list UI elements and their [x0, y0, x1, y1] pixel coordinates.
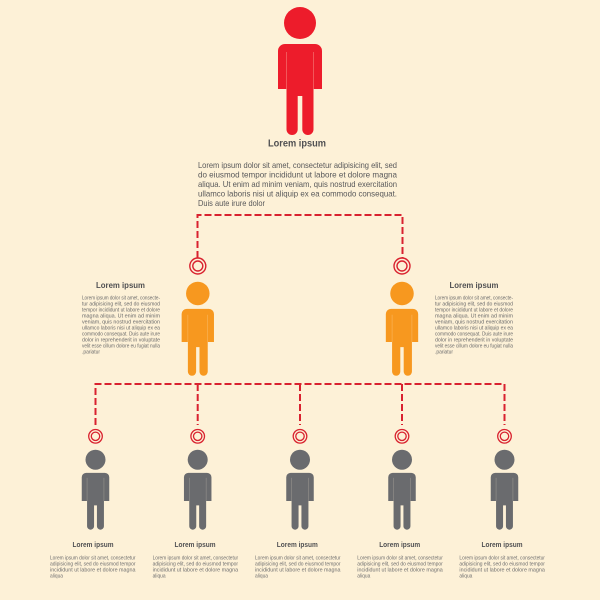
team member 5: aliqua: [459, 574, 473, 580]
text block: right manager: .pariatur: [435, 350, 453, 356]
text block: right manager: commodo consequat. Duis aute irure: [435, 332, 513, 338]
text block: right manager: veniam, quis nostrud exercitation: [435, 320, 513, 326]
figure: orange right manager: [386, 282, 418, 376]
team member 5: incididunt ut labore et dolore magna: [459, 568, 545, 574]
heading: leader name: Lorem ipsum: [268, 138, 326, 150]
team member 1: adipisicing elit, sed do eiusmod tempor: [50, 562, 136, 568]
team member 3: adipisicing elit, sed do eiusmod tempor: [255, 562, 341, 568]
text block: leader description: aliqua. Ut enim ad minim veniam, quis nostrud exercitation: [198, 180, 397, 189]
text block: left manager: .pariatur: [82, 350, 100, 356]
text block: left manager: Lorem ipsum dolor sit amet, consecte-: [82, 296, 160, 302]
text block: leader description: do eiusmod tempor incididunt ut labore et dolore magna: [198, 170, 397, 180]
team member 4: adipisicing elit, sed do eiusmod tempor: [357, 562, 443, 568]
team member 2: Lorem ipsum dolor sit amet, consectetur: [153, 556, 238, 562]
text block: right manager: velit esse cillum dolore eu fugiat nulla: [435, 344, 513, 350]
team member 3: Lorem ipsum dolor sit amet, consectetur: [255, 556, 341, 562]
text block: right manager: tur adipisicing elit, sed do eiusmod: [435, 302, 513, 308]
figure: red leader: [278, 7, 322, 135]
team member 3: incididunt ut labore et dolore magna: [255, 568, 341, 574]
team member 4: [357, 430, 443, 580]
text block: leader description: Duis aute irure dolor: [198, 199, 265, 208]
team member 5: [459, 430, 545, 580]
team member 1: Lorem ipsum: [72, 542, 114, 549]
text block: right manager: [435, 296, 513, 356]
team member 3: [255, 430, 341, 580]
heading: right manager: Lorem ipsum: [450, 280, 499, 290]
text block: left manager: ullamco laboris nisi ut aliquip ex ea: [82, 326, 160, 332]
team member 2: [153, 430, 238, 580]
team member 4: incididunt ut labore et dolore magna: [357, 568, 443, 574]
team member 5: Lorem ipsum: [482, 542, 522, 549]
text block: leader description: ullamco laboris nisi ut aliquip ex ea commodo consequat.: [198, 190, 397, 198]
team member 3: Lorem ipsum: [277, 542, 318, 549]
icon: target left manager: [190, 258, 206, 274]
figure: orange left manager: [182, 282, 214, 376]
text block: right manager: Lorem ipsum dolor sit amet, consecte-: [435, 296, 513, 302]
team member 2: aliqua: [153, 574, 166, 580]
text block: left manager: tur adipisicing elit, sed do eiusmod: [82, 302, 160, 308]
text block: left manager: magna aliqua. Ut enim ad minim: [82, 314, 160, 320]
team member 1: Lorem ipsum dolor sit amet, consectetur: [50, 556, 136, 562]
team member 1: [50, 430, 136, 580]
text block: leader description: Lorem ipsum dolor sit amet, consectetur adipisicing elit, sed: [198, 161, 397, 170]
text block: right manager: tempor incididunt ut labore et dolore: [435, 308, 513, 314]
team member 3: aliqua: [255, 574, 268, 580]
text block: left manager: dolor in reprehenderit in voluptate: [82, 338, 160, 344]
team member 4: Lorem ipsum: [379, 542, 420, 549]
text block: left manager: [82, 296, 160, 356]
text block: left manager: tempor incididunt ut labore et dolore: [82, 308, 160, 314]
text block: right manager: magna aliqua. Ut enim ad minim: [435, 314, 513, 320]
team member 1: aliqua: [50, 574, 63, 580]
team member 1: incididunt ut labore et dolore magna: [50, 568, 136, 574]
text block: left manager: veniam, quis nostrud exercitation: [82, 320, 160, 326]
team member 5: Lorem ipsum dolor sit amet, consectetur: [459, 556, 545, 562]
team member 2: Lorem ipsum: [174, 542, 216, 549]
team member 2: adipisicing elit, sed do eiusmod tempor: [153, 562, 238, 568]
text block: left manager: velit esse cillum dolore eu fugiat nulla: [82, 344, 160, 350]
text block: right manager: dolor in reprehenderit in voluptate: [435, 338, 513, 344]
text block: right manager: ullamco laboris nisi ut aliquip ex ea: [435, 326, 513, 332]
connector: top dashed bracket: [198, 215, 402, 258]
icon: target right manager: [394, 258, 410, 274]
heading: left manager: Lorem ipsum: [96, 280, 145, 290]
text block: left manager: commodo consequat. Duis aute irure: [82, 332, 160, 338]
team member 5: adipisicing elit, sed do eiusmod tempor: [459, 562, 545, 568]
team member 4: aliqua: [357, 574, 370, 580]
connector: lower dashed tree: [96, 384, 504, 425]
team member 2: incididunt ut labore et dolore magna: [153, 568, 238, 574]
text block: leader description: [198, 161, 397, 208]
team member 4: Lorem ipsum dolor sit amet, consectetur: [357, 556, 443, 562]
